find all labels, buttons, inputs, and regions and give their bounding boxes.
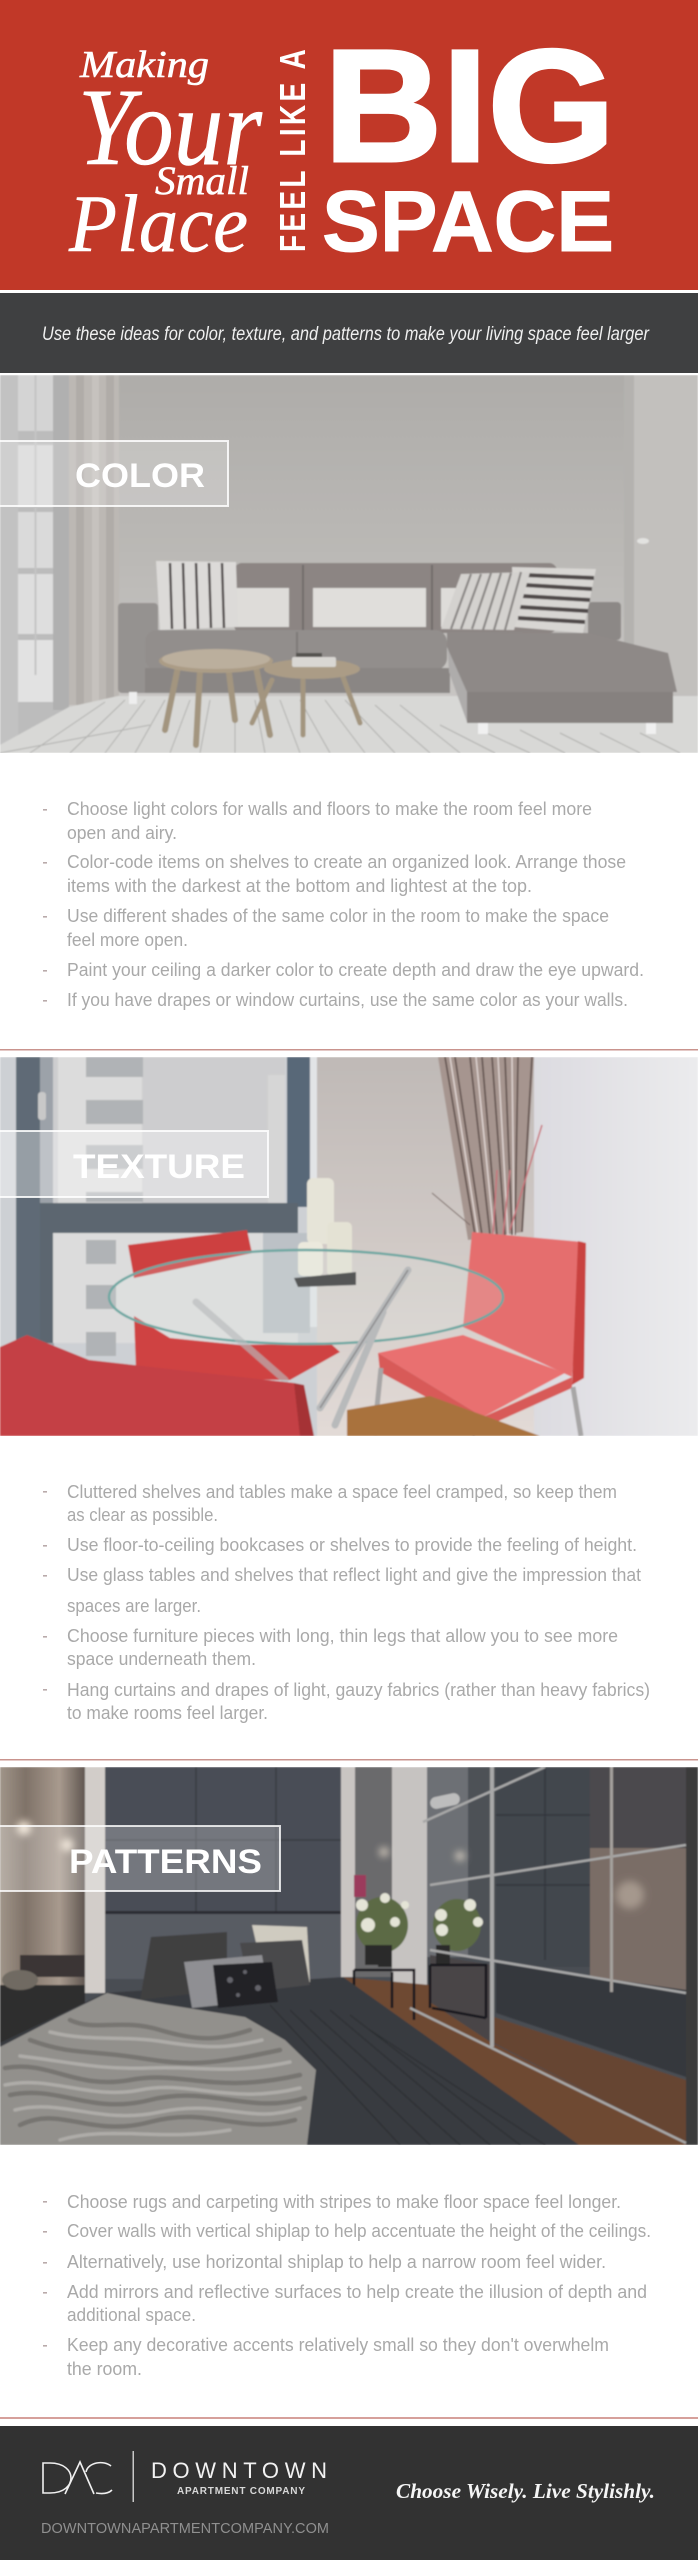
intro strip: [0, 293, 698, 373]
text block: color tips: [43, 799, 644, 1010]
header banner: [0, 0, 698, 290]
brand name: DOWNTOWN: [151, 2458, 327, 2483]
text block: texture tips: Use floor-to-ceiling bookcases or shelves to provide the feeling of height.: [67, 1535, 637, 1555]
text block: patterns tips: Choose rugs and carpeting with stripes to make floor space feel longer.: [67, 2192, 621, 2212]
title: feel like a: FEEL LIKE A: [273, 49, 313, 252]
website: DOWNTOWNAPARTMENTCOMPANY.COM: [41, 2521, 329, 2537]
text block: texture tips: [43, 1482, 650, 1723]
brand subline: APARTMENT COMPANY: [177, 2486, 305, 2497]
heading: patterns: PATTERNS: [69, 1843, 262, 1881]
title: Making Your Small Place: Place: [68, 178, 248, 269]
text block: texture tips: Cluttered shelves and tables make a space feel cramped, so keep them: [67, 1482, 617, 1502]
text block: patterns tips: Alternatively, use horizontal shiplap to help a narrow room feel wider.: [67, 2252, 606, 2272]
text block: texture tips: Use glass tables and shelves that reflect light and give the impression that: [67, 1565, 641, 1585]
text block: color tips: feel more open.: [67, 930, 188, 950]
photo: glass table with red chairs: [0, 1057, 698, 1436]
panel: patterns photo: [0, 1767, 698, 2145]
title: Making Your Small Place: [68, 44, 263, 269]
heading: texture: TEXTURE: [73, 1148, 245, 1186]
text block: color tips: Choose light colors for walls and floors to make the room feel more: [67, 799, 592, 819]
text block: color tips: Color-code items on shelves to create an organized look. Arrange those: [67, 852, 626, 872]
text block: patterns tips: Cover walls with vertical shiplap to help accentuate the height of the ceilings.: [67, 2221, 651, 2241]
text block: patterns tips: Keep any decorative accents relatively small so they don't overwhelm: [67, 2335, 609, 2355]
text block: texture tips: as clear as possible.: [67, 1505, 218, 1525]
text block: texture tips: Choose furniture pieces with long, thin legs that allow you to see more: [67, 1626, 618, 1646]
text block: patterns tips: the room.: [67, 2359, 142, 2379]
title: Making Your Small Place: Your: [78, 66, 263, 188]
text block: texture tips: to make rooms feel larger.: [67, 1703, 268, 1723]
text block: color tips: Use different shades of the same color in the room to make the space: [67, 906, 609, 926]
icon: DAC logo: [43, 2462, 112, 2494]
text block: patterns tips: Add mirrors and reflective surfaces to help create the illusion of depth and: [67, 2282, 647, 2302]
heading: color: COLOR: [75, 457, 205, 495]
title: big: BIG: [324, 16, 615, 195]
title: Making Your Small Place: Making: [79, 44, 209, 86]
text block: texture tips: Hang curtains and drapes of light, gauzy fabrics (rather than heavy fabrics): [67, 1680, 650, 1700]
text block: color tips: open and airy.: [67, 823, 177, 843]
text block: patterns tips: [43, 2192, 651, 2379]
photo: living room with grey sofa: [0, 375, 698, 753]
text block: color tips: items with the darkest at the bottom and lightest at the top.: [67, 876, 532, 896]
text block: color tips: If you have drapes or window curtains, use the same color as your walls.: [67, 990, 628, 1010]
title: Making Your Small Place: Small: [155, 158, 249, 203]
text block: texture tips: spaces are larger.: [67, 1596, 201, 1616]
text block: patterns tips: additional space.: [67, 2305, 196, 2325]
footer: [0, 2426, 698, 2560]
label: color: [0, 441, 228, 506]
panel: texture photo: [0, 1057, 698, 1436]
title: space: SPACE: [322, 174, 614, 270]
label: texture: [0, 1131, 268, 1197]
panel: color photo: [0, 375, 698, 753]
text block: texture tips: space underneath them.: [67, 1649, 256, 1669]
slogan: Choose Wisely. Live Stylishly.: [396, 2479, 655, 2503]
label: patterns: [0, 1826, 280, 1891]
text block: color tips: Paint your ceiling a darker color to create depth and draw the eye upward.: [67, 960, 644, 980]
photo: dark bedroom with mirrored wardrobe: [0, 1767, 698, 2145]
